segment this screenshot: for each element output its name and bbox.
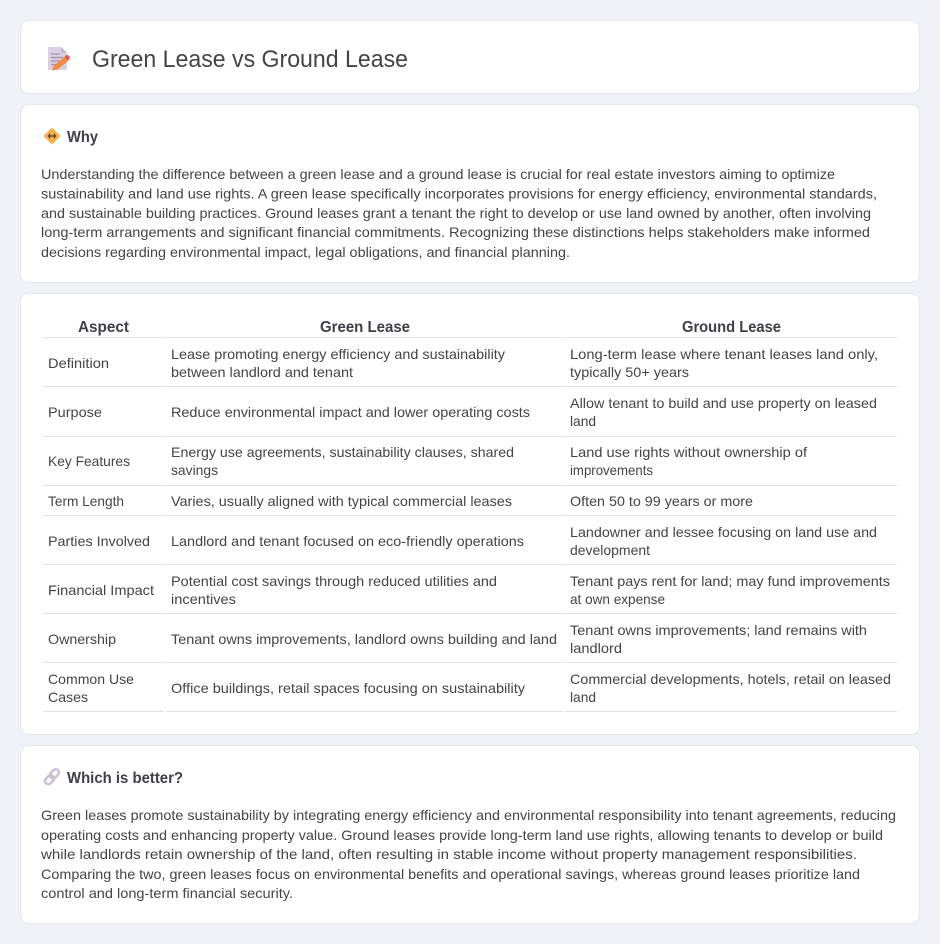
row: parties involved bbox=[48, 524, 877, 558]
row: parties involved: Landowner and lessee focusing on land use and bbox=[570, 524, 877, 540]
icon: chain link bbox=[44, 768, 60, 786]
row: common use cases: land bbox=[570, 689, 596, 705]
row: financial impact: at own expense bbox=[570, 591, 665, 607]
row: financial impact: Financial Impact bbox=[48, 582, 154, 598]
row: financial impact: Potential cost savings through reduced utilities and bbox=[171, 573, 497, 589]
row: key features: savings bbox=[171, 462, 218, 478]
row: ownership bbox=[48, 622, 867, 656]
row: key features: Key Features bbox=[48, 453, 130, 469]
row: common use cases bbox=[48, 671, 891, 705]
row: parties involved: Landlord and tenant focused on eco-friendly operations bbox=[171, 533, 524, 549]
row: purpose bbox=[48, 395, 877, 429]
text block: why paragraph: and sustainable building practices. Ground leases grant a tenant the right to develop or use land owned by another, often involving bbox=[41, 205, 871, 221]
row: parties involved: development bbox=[570, 542, 650, 558]
table header row: Ground Lease bbox=[682, 319, 781, 336]
table header row: Green Lease bbox=[320, 319, 410, 336]
icon: warning diamond bbox=[44, 128, 60, 144]
row: common use cases: Common Use bbox=[48, 671, 134, 687]
row: definition: Definition bbox=[48, 355, 109, 371]
row: financial impact: Tenant pays rent for land; may fund improvements bbox=[570, 573, 890, 589]
row: purpose: Purpose bbox=[48, 404, 102, 420]
row: purpose: land bbox=[570, 413, 596, 429]
table header row bbox=[78, 319, 781, 336]
row: definition: typically 50+ years bbox=[570, 364, 689, 380]
row: parties involved: Parties Involved bbox=[48, 533, 150, 549]
row: ownership: landlord bbox=[570, 640, 622, 656]
heading: which is better: Which is better? bbox=[67, 770, 183, 787]
row: key features bbox=[48, 444, 807, 478]
row: key features: Energy use agreements, sustainability clauses, shared bbox=[171, 444, 514, 460]
row: term length bbox=[48, 493, 753, 509]
row: common use cases: Cases bbox=[48, 689, 88, 705]
row: definition bbox=[48, 346, 878, 380]
text block: why paragraph: decisions regarding environmental impact, legal obligations, and financial planning. bbox=[41, 244, 570, 260]
text block: why paragraph bbox=[41, 166, 877, 260]
row: definition: Lease promoting energy efficiency and sustainability bbox=[171, 346, 505, 362]
text block: which is better paragraph: while landlords retain ownership of the land, often resulting in stable income without property management responsibilities. bbox=[40, 846, 857, 862]
row: purpose: Allow tenant to build and use property on leased bbox=[570, 395, 877, 411]
row: ownership: Ownership bbox=[48, 631, 116, 647]
text block: which is better paragraph: Comparing the two, green leases focus on environmental benefits and operational savings, whereas ground leases prioritize land bbox=[41, 866, 860, 882]
row: common use cases: Commercial developments, hotels, retail on leased bbox=[570, 671, 891, 687]
row: definition: Long-term lease where tenant leases land only, bbox=[570, 346, 878, 362]
panel: why bbox=[20, 104, 920, 282]
panel: title header bbox=[20, 20, 920, 94]
text block: why paragraph: sustainability and land use rights. A green lease specifically incorporates provisions for energy efficiency, environmental standards, bbox=[41, 186, 877, 202]
title: Green Lease vs Ground Lease bbox=[92, 46, 408, 73]
text block: which is better paragraph: Green leases promote sustainability by integrating energy efficiency and environmental responsibility into tenant agreements, reducing bbox=[41, 807, 896, 823]
row: ownership: Tenant owns improvements; land remains with bbox=[570, 622, 867, 638]
row: term length: Often 50 to 99 years or more bbox=[570, 493, 753, 509]
row: term length: Term Length bbox=[48, 493, 124, 509]
row: financial impact bbox=[48, 573, 890, 607]
row: purpose: Reduce environmental impact and lower operating costs bbox=[171, 404, 530, 420]
panel: comparison table bbox=[20, 294, 920, 734]
row: financial impact: incentives bbox=[171, 591, 236, 607]
heading: why: Why bbox=[67, 129, 98, 146]
row: ownership: Tenant owns improvements, landlord owns building and land bbox=[171, 631, 557, 647]
row: key features: Land use rights without ownership of bbox=[570, 444, 807, 460]
text block: why paragraph: long-term arrangements and significant financial commitments. Recognizing these distinctions helps stakeholders make informed bbox=[41, 224, 870, 240]
text block: which is better paragraph: control and long-term financial security. bbox=[41, 885, 293, 901]
icon: memo with pencil bbox=[48, 47, 70, 70]
row: definition: between landlord and tenant bbox=[171, 364, 353, 380]
text block: which is better paragraph bbox=[40, 807, 896, 901]
row: common use cases: Office buildings, retail spaces focusing on sustainability bbox=[171, 680, 525, 696]
panel: which is better bbox=[20, 746, 920, 924]
text block: why paragraph: Understanding the difference between a green lease and a ground lease is crucial for real estate investors aiming to optimize bbox=[41, 166, 835, 182]
row: term length: Varies, usually aligned with typical commercial leases bbox=[171, 493, 512, 509]
row: key features: improvements bbox=[570, 462, 653, 478]
text block: which is better paragraph: operating costs and enhancing property value. Ground leases provide long-term land use rights, allowing tenants to develop or build bbox=[41, 827, 883, 843]
table header row: Aspect bbox=[78, 319, 130, 336]
